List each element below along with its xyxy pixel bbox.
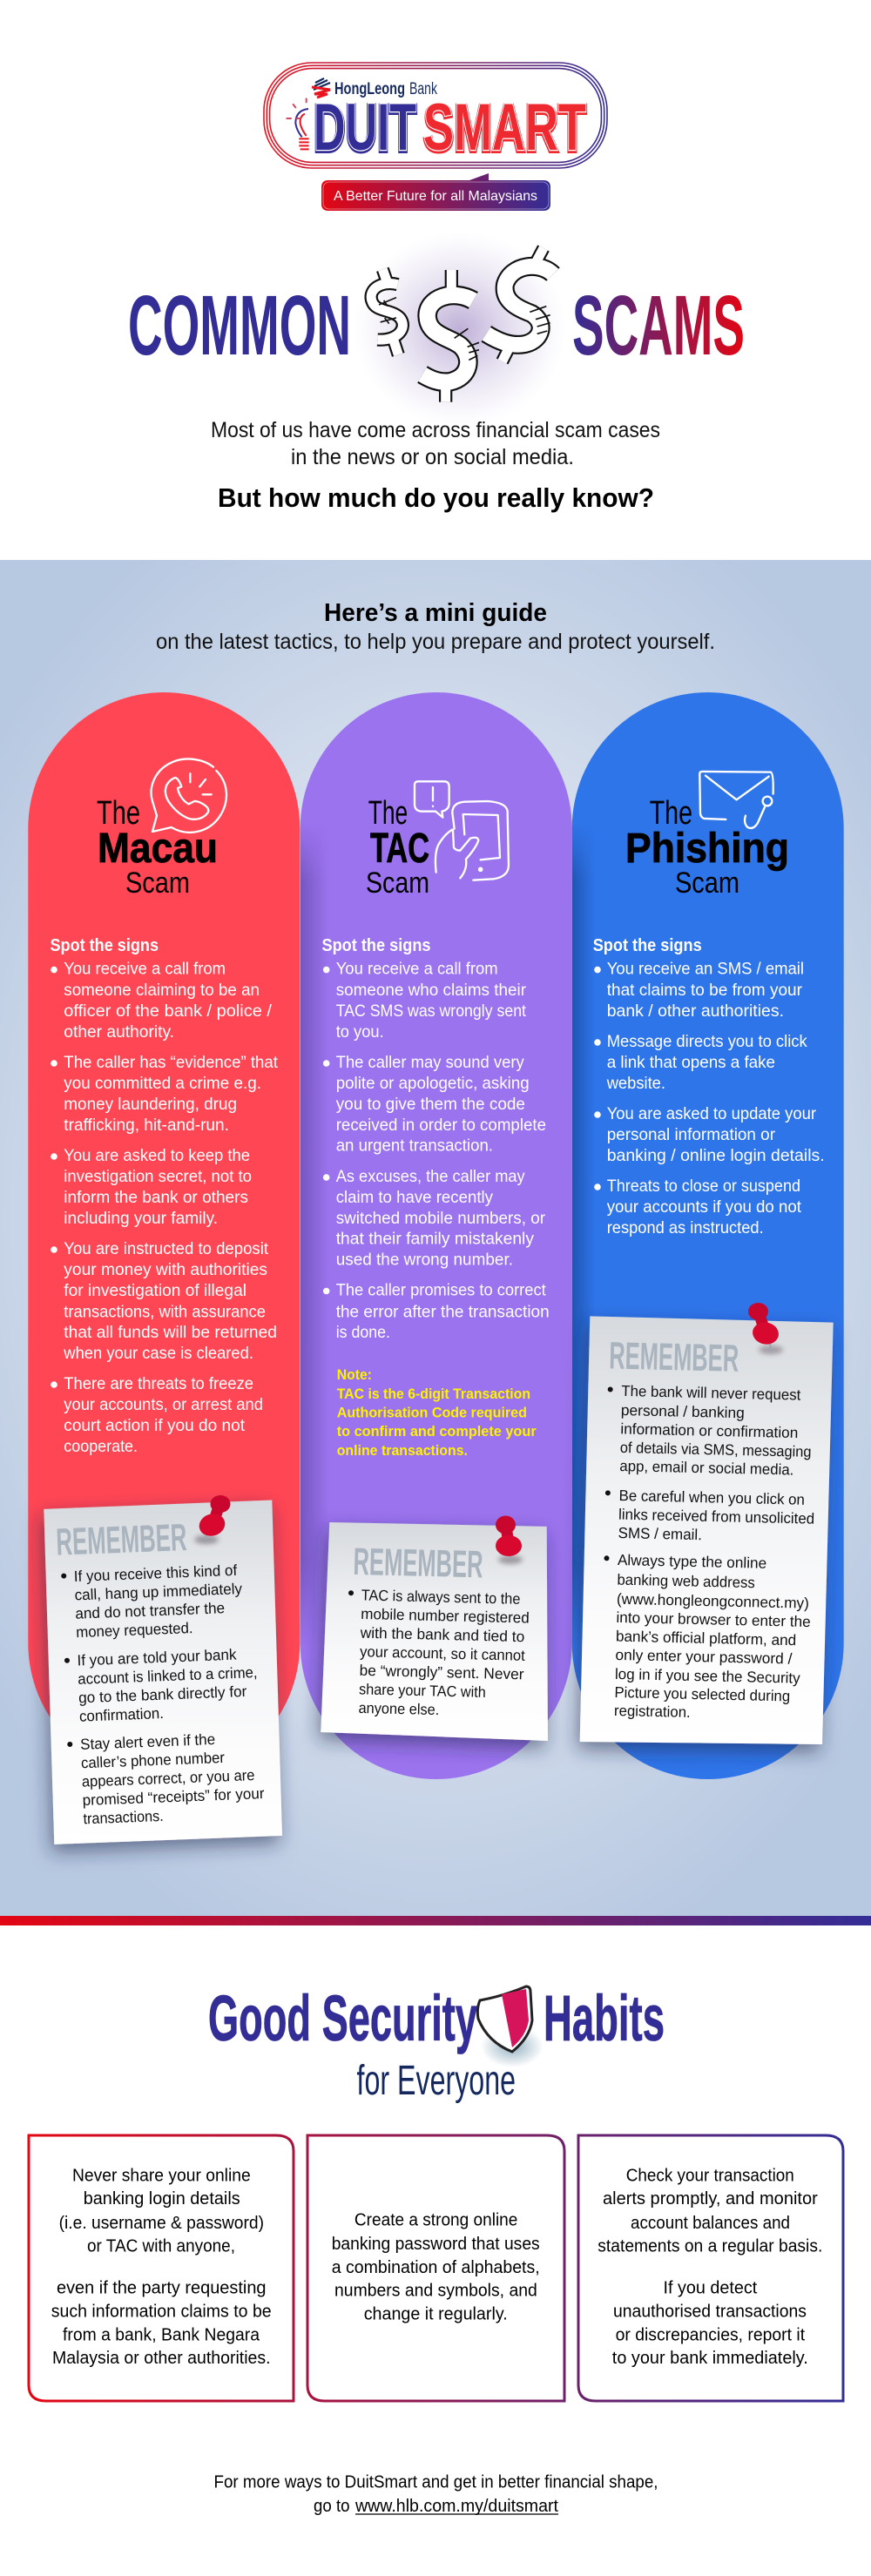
habit card 3 (578, 2135, 843, 2401)
spot the signs: TAC: you to give them the code (336, 1095, 525, 1114)
habit card 1: such information claims to be (51, 2303, 272, 2322)
remember note: macau: If you are told your bank (77, 1646, 237, 1669)
intro text (211, 418, 660, 513)
heading: the phishing scam (625, 795, 789, 900)
spot the signs: macau: You are asked to keep the (64, 1146, 250, 1165)
remember note: phishing: banking web address (617, 1571, 755, 1591)
footer text: go to (314, 2497, 350, 2516)
spot the signs: TAC: the error after the transaction (336, 1303, 550, 1322)
heading: mini guide (156, 599, 715, 654)
remember note: TAC: mobile number registered (361, 1605, 530, 1627)
column: phishing scam (580, 772, 834, 1744)
spot the signs: TAC: that their family mistakenly (336, 1230, 534, 1249)
panel: TAC scam pill (300, 692, 572, 1779)
remember note: macau: REMEMBER (56, 1516, 187, 1564)
spot the signs: TAC: received in order to complete (336, 1116, 546, 1135)
heading: the macau scam (97, 795, 218, 900)
heading: mini guide: on the latest tactics, to help you prepare and protect yourself. (156, 630, 715, 654)
icon: Hong Leong emblem (312, 78, 330, 98)
bank name: Bank (409, 80, 437, 98)
note: TAC definition: Note: (337, 1366, 372, 1383)
remember note: macau: call, hang up immediately (74, 1580, 243, 1603)
title word COMMON: COMMON (128, 278, 351, 373)
spot the signs: phishing: banking / online login details. (607, 1146, 825, 1165)
remember note: phishing: The bank will never request (621, 1382, 801, 1404)
spot the signs: phishing (593, 936, 825, 1237)
logo frame (264, 63, 607, 168)
habit card 2: a combination of alphabets, (332, 2258, 540, 2277)
remember note: macau: If you receive this kind of (73, 1561, 238, 1585)
dollar glow (354, 232, 566, 427)
spot the signs: TAC (322, 936, 550, 1342)
remember note: macau: transactions. (83, 1807, 164, 1827)
spot the signs: TAC: to you. (336, 1022, 384, 1042)
wordmark SMART (423, 91, 586, 165)
remember note: phishing: Picture you selected during (614, 1683, 790, 1705)
remember note: phishing: Be careful when you click on (618, 1487, 805, 1508)
remember note: phishing: only enter your password / (615, 1646, 793, 1668)
remember note: TAC: be “wrongly” sent. Never (359, 1662, 524, 1682)
spot the signs: phishing: Message directs you to click (607, 1032, 807, 1051)
heading: the TAC scam: Scam (366, 867, 429, 900)
remember note: macau: appears correct, or you are (81, 1766, 255, 1790)
spot the signs: TAC: switched mobile numbers, or (336, 1209, 545, 1228)
wordmark SMART: SMART (423, 91, 586, 165)
spot the signs: phishing: respond as instructed. (607, 1218, 764, 1237)
remember note: macau: promised “receipts” for your (82, 1784, 265, 1809)
spot the signs: macau: investigation secret, not to (64, 1167, 252, 1186)
spot the signs: macau: money laundering, drug (64, 1095, 237, 1114)
remember note: phishing: log in if you see the Security (615, 1665, 800, 1687)
remember note: phishing: SMS / email. (618, 1524, 702, 1543)
spot the signs: macau: court action if you do not (64, 1416, 246, 1435)
footer text: www.hlb.com.my/duitsmart (354, 2497, 558, 2516)
panel: mini guide background (0, 560, 871, 1916)
icon: light bulb (287, 98, 309, 149)
habit card 3: alerts promptly, and monitor (603, 2189, 818, 2208)
logo: DuitSmart (264, 63, 607, 211)
spot the signs: macau: You are instructed to deposit (64, 1239, 269, 1258)
habit card 1: from a bank, Bank Negara (63, 2325, 260, 2344)
remember note: macau: Stay alert even if the (80, 1730, 215, 1753)
bank name: HongLeong (334, 80, 405, 98)
heading: the phishing scam: Phishing (625, 826, 789, 872)
heading: the phishing scam: Scam (675, 867, 739, 900)
habit card 1: or TAC with anyone, (87, 2236, 235, 2256)
spot the signs: macau: trafficking, hit-and-run. (64, 1116, 229, 1135)
spot the signs: phishing: that claims to be from your (607, 981, 802, 1000)
icon: phone speech bubble (152, 759, 226, 833)
spot the signs: phishing: your accounts if you do not (607, 1197, 802, 1217)
habit card 3: If you detect (664, 2279, 758, 2298)
tagline banner: A Better Future for all Malaysians (334, 189, 537, 204)
remember note: TAC: REMEMBER (353, 1541, 483, 1587)
spot the signs: phishing: personal information or (607, 1125, 775, 1144)
remember note: phishing: app, email or social media. (619, 1457, 794, 1479)
icon: phone and alert bubble (415, 781, 509, 880)
habit card 1: even if the party requesting (57, 2279, 267, 2298)
intro question: But how much do you really know? (218, 482, 654, 513)
spot the signs: macau: other authority. (64, 1022, 174, 1042)
remember note: phishing: REMEMBER (609, 1334, 739, 1380)
habit card 1: Never share your online (72, 2166, 251, 2185)
icon: push pin (496, 1515, 523, 1564)
spot the signs: TAC: Spot the signs (322, 936, 430, 955)
remember note: TAC (321, 1515, 548, 1741)
spot the signs: macau: You receive a call from (64, 960, 226, 979)
column: TAC scam (321, 781, 550, 1741)
gradient divider bar (0, 1916, 871, 1925)
wordmark SMART: SMART (423, 92, 586, 165)
remember note: macau: go to the bank directly for (78, 1682, 247, 1706)
spot the signs: macau: officer of the bank / police / (64, 1001, 273, 1021)
remember note: TAC: TAC is always sent to the (361, 1586, 521, 1608)
remember note: phishing: bank’s official platform, and (616, 1628, 796, 1649)
icon: push pin (194, 1495, 230, 1544)
intro text: in the news or on social media. (291, 445, 574, 469)
remember note: macau: and do not transfer the (75, 1599, 225, 1622)
spot the signs: TAC: polite or apologetic, asking (336, 1074, 530, 1093)
habit card 1: (i.e. username & password) (59, 2214, 264, 2233)
icon: shield (477, 1986, 544, 2067)
spot the signs: TAC: You receive a call from (336, 960, 498, 979)
panel: macau scam pill (28, 692, 300, 1779)
wordmark DUIT: DUIT (314, 91, 416, 165)
spot the signs: phishing: You receive an SMS / email (607, 960, 804, 979)
spot the signs: macau: you committed a crime e.g. (64, 1074, 261, 1093)
habit card 1: Malaysia or other authorities. (52, 2349, 271, 2368)
spot the signs: macau: There are threats to freeze (64, 1374, 253, 1393)
remember note: macau: caller’s phone number (81, 1749, 225, 1771)
remember note: macau: confirmation. (79, 1704, 164, 1725)
habit card 2 (307, 2135, 564, 2401)
heading: mini guide: Here’s a mini guide (324, 599, 547, 627)
remember note: TAC: your account, so it cannot (360, 1642, 525, 1664)
remember note: macau: money requested. (76, 1619, 193, 1641)
spot the signs: macau: inform the bank or others (64, 1188, 248, 1207)
wordmark DUIT: DUIT (314, 91, 416, 165)
heading words: Good Security (208, 1982, 477, 2054)
spot the signs: macau: The caller has “evidence” that (64, 1053, 279, 1072)
icon: push pin (748, 1303, 783, 1354)
spot the signs: TAC: As excuses, the caller may (336, 1167, 525, 1186)
remember note: phishing: personal / banking (621, 1401, 745, 1421)
spot the signs: macau: cooperate. (64, 1437, 138, 1456)
heading: the macau scam: Macau (98, 826, 218, 872)
remember note: TAC: anyone else. (358, 1699, 440, 1718)
note: TAC definition (337, 1366, 537, 1459)
spot the signs: TAC: The caller may sound very (336, 1053, 524, 1072)
spot the signs: macau: when your case is cleared. (63, 1344, 253, 1363)
note: TAC definition: to confirm and complete your (337, 1423, 537, 1440)
subheading: for Everyone (357, 2058, 516, 2104)
remember note: phishing (580, 1303, 834, 1744)
remember note: phishing: registration. (614, 1702, 691, 1721)
heading: the TAC scam (366, 795, 429, 900)
habit card 2: numbers and symbols, and (334, 2282, 537, 2301)
spot the signs: TAC: someone who claims their (336, 981, 526, 1000)
spot the signs: TAC: The caller promises to correct (336, 1280, 546, 1299)
remember note: phishing: information or confirmation (620, 1419, 799, 1441)
habit card 3: or discrepancies, report it (616, 2325, 806, 2344)
heading: the phishing scam: The (650, 795, 692, 832)
wordmark DUIT (314, 91, 416, 165)
icon: envelope with fish hook (699, 772, 773, 828)
habit card 2: banking password that uses (332, 2235, 540, 2254)
habit card 1: banking login details (84, 2189, 240, 2208)
remember note: phishing: of details via SMS, messaging (620, 1439, 812, 1460)
spot the signs: TAC: used the wrong number. (336, 1251, 513, 1270)
remember note: macau (44, 1495, 282, 1844)
dollar signs (371, 248, 553, 402)
habit card 1 (29, 2135, 294, 2401)
wordmark DUIT: DUIT (314, 92, 416, 165)
spot the signs: TAC: an urgent transaction. (336, 1136, 493, 1155)
remember note: phishing: into your browser to enter the (616, 1608, 811, 1630)
title: Common Scams (128, 232, 745, 427)
remember note: phishing: links received from unsolicited (618, 1506, 814, 1527)
habit card 3: Check your transaction (626, 2166, 794, 2185)
remember note: TAC: share your TAC with (359, 1680, 486, 1701)
column: macau scam (44, 759, 282, 1844)
habit card 3: to your bank immediately. (612, 2349, 808, 2368)
spot the signs: macau: transactions, with assurance (64, 1303, 266, 1322)
heading: the macau scam: The (97, 795, 140, 832)
heading: the TAC scam: TAC (370, 826, 429, 872)
tagline banner (321, 173, 550, 211)
spot the signs: phishing: You are asked to update your (607, 1104, 816, 1123)
note: TAC definition: Authorisation Code required (337, 1404, 527, 1421)
panel: phishing scam pill (572, 692, 844, 1779)
note: TAC definition: TAC is the 6-digit Transaction (337, 1386, 530, 1402)
remember note: TAC: with the bank and tied to (359, 1624, 525, 1645)
footer text: For more ways to DuitSmart and get in better financial shape, (214, 2473, 658, 2492)
habit card 3: account balances and (631, 2214, 790, 2233)
remember note: macau: account is linked to a crime, (78, 1663, 258, 1688)
footer text (214, 2473, 658, 2516)
habit card 3: unauthorised transactions (613, 2303, 807, 2322)
spot the signs: macau: your accounts, or arrest and (64, 1395, 263, 1414)
spot the signs: phishing: website. (606, 1074, 665, 1093)
title word SCAMS: SCAMS (572, 278, 745, 373)
heading: the TAC scam: The (368, 795, 408, 832)
heading: the macau scam: Scam (125, 867, 190, 900)
spot the signs: macau (51, 936, 279, 1456)
wordmark SMART: SMART (423, 91, 586, 165)
habit card 3: statements on a regular basis. (598, 2236, 822, 2256)
spot the signs: TAC: is done. (336, 1323, 390, 1342)
remember note: phishing: Always type the online (618, 1551, 766, 1572)
spot the signs: phishing: a link that opens a fake (607, 1053, 775, 1072)
spot the signs: macau: Spot the signs (51, 936, 159, 955)
habit card 2: change it regularly. (364, 2305, 508, 2324)
spot the signs: macau: including your family. (64, 1209, 218, 1228)
spot the signs: macau: someone claiming to be an (64, 981, 260, 1000)
spot the signs: macau: your money with authorities (64, 1260, 267, 1279)
spot the signs: phishing: Spot the signs (593, 936, 702, 955)
spot the signs: phishing: bank / other authorities. (607, 1001, 784, 1021)
heading: good security habits: Habits (544, 1982, 665, 2054)
spot the signs: TAC: TAC SMS was wrongly sent (336, 1001, 527, 1021)
heading: good security habits (208, 1982, 665, 2104)
spot the signs: macau: that all funds will be returned (64, 1323, 277, 1342)
spot the signs: phishing: Threats to close or suspend (607, 1177, 800, 1196)
remember note: phishing: (www.hongleongconnect.my) (617, 1590, 809, 1612)
note: TAC definition: online transactions. (337, 1442, 468, 1459)
spot the signs: TAC: claim to have recently (336, 1188, 493, 1207)
spot the signs: macau: for investigation of illegal (64, 1281, 246, 1300)
habit card 2: Create a strong online (354, 2211, 517, 2230)
illustration: torn dollar signs (354, 232, 566, 427)
intro text: Most of us have come across financial scam cases (211, 418, 660, 442)
